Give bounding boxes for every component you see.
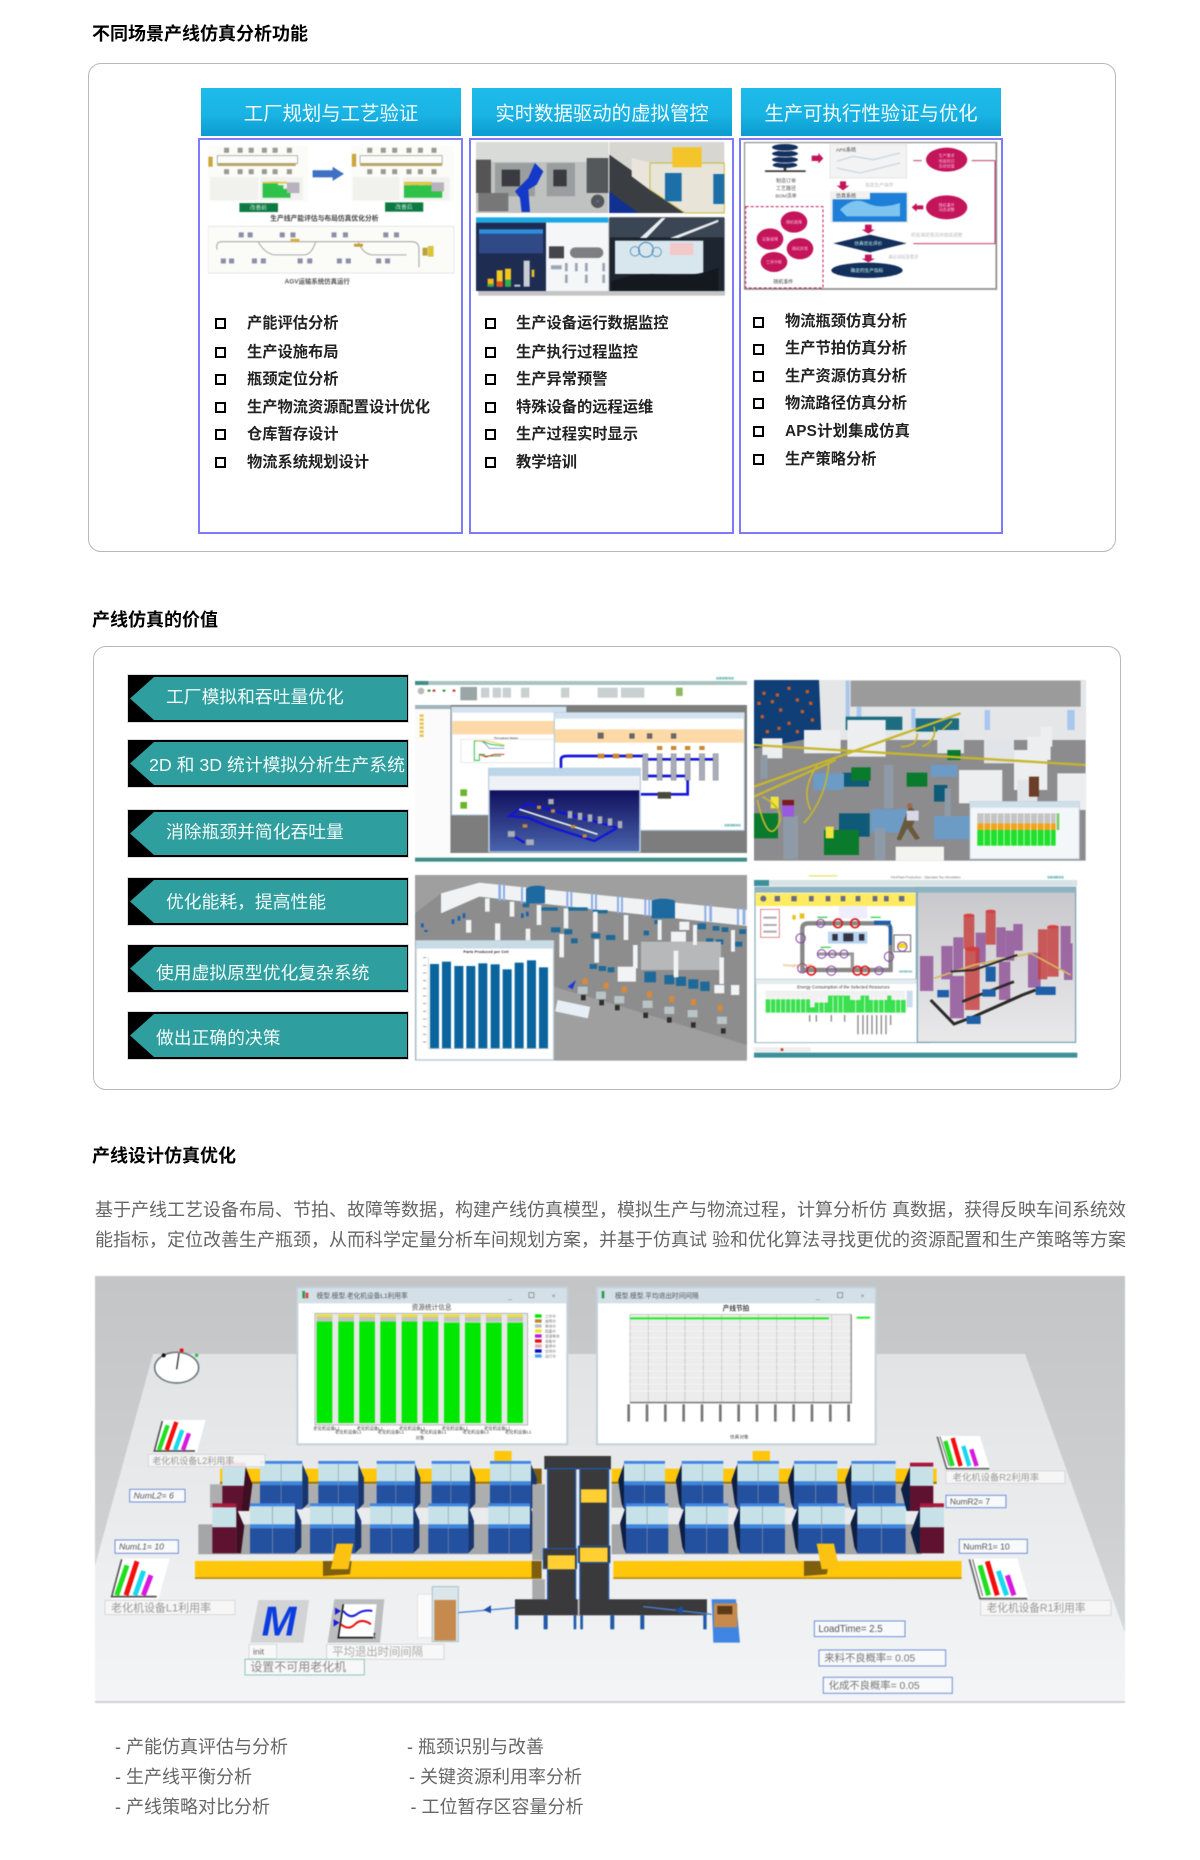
- chart window: utilisation: ×: [552, 1293, 556, 1300]
- chart window: utilisation: 资源等待: [545, 1333, 560, 1338]
- column header: real-time virtual control: [472, 88, 732, 136]
- chart window: utilisation: 老化机设备L1: [420, 1428, 447, 1435]
- flow diagram: APS and simulation loop: APS系统: [836, 146, 856, 153]
- flow diagram: APS and simulation loop: 随机异常: [792, 245, 808, 251]
- parameter labels left: [105, 1454, 444, 1675]
- list item: 生产设施布局: [247, 344, 338, 361]
- panel: value of line simulation: [92, 646, 1121, 1090]
- list item: 生产资源仿真分析: [785, 368, 907, 385]
- column box: executable verification: [739, 138, 1003, 534]
- parameter labels right: NumR1= 10: [963, 1541, 1010, 1551]
- chart window: utilisation: 准备中: [545, 1338, 556, 1343]
- analysis item: - 关键资源利用率分析: [409, 1767, 582, 1787]
- line machines and conveyors: [195, 1451, 542, 1579]
- parameter labels right: 老化机设备R2利用率: [953, 1472, 1039, 1483]
- icon: material station left: [418, 1587, 515, 1642]
- label tag: virtual prototypes: [128, 945, 408, 992]
- list: analysis items right column: [407, 1737, 584, 1817]
- chart window: line takt: 产线节拍: [723, 1303, 750, 1312]
- bullet icon: [753, 454, 764, 465]
- label tag: remove bottlenecks: [128, 810, 408, 857]
- chart window: line takt: [597, 1288, 876, 1444]
- parameter labels right: 来料不良概率= 0.05: [824, 1652, 916, 1665]
- label tag: 2D and 3D statistics: [128, 740, 408, 787]
- chart window: utilisation: 老化机设备L1: [399, 1425, 426, 1432]
- flow diagram: APS and simulation loop: 仿真优化评价: [854, 240, 883, 247]
- column: executable verification: [739, 88, 1003, 534]
- label tag: remove bottlenecks: 消除瓶颈并简化吞吐量: [166, 822, 344, 842]
- bullet icon: [753, 344, 764, 355]
- flow diagram: APS and simulation loop: 制造订单: [776, 178, 796, 185]
- column header: factory planning: [201, 88, 461, 136]
- screenshot: energy analysis with 3D columns: FlexPlant Production - Standard Tec-Simulation: [890, 876, 960, 880]
- flow diagram: APS and simulation loop: 工艺路径: [776, 185, 796, 192]
- column header: real-time virtual control: 实时数据驱动的虚拟管控: [495, 103, 709, 125]
- diagram: layout before and after: 改善后: [395, 203, 413, 211]
- heading: value of line simulation: 产线仿真的价值: [92, 610, 218, 630]
- label tag: factory simulation: [128, 675, 408, 722]
- screenshot: energy analysis with 3D columns: [753, 874, 1078, 1058]
- screenshot: simulation software windows: SIEMENS: [724, 824, 741, 828]
- flow diagram: APS and simulation loop: 确定的生产指标: [851, 267, 884, 274]
- parameter labels left: 老化机设备L2利用率: [152, 1455, 234, 1466]
- list item: 生产物流资源配置设计优化: [247, 399, 430, 416]
- flow diagram: APS and simulation loop: 仿真系统: [836, 193, 856, 200]
- bullet icon: [485, 318, 496, 329]
- bullet icon: [215, 318, 226, 329]
- label tag: factory simulation: 工厂模拟和吞吐量优化: [166, 687, 344, 707]
- screenshot: energy analysis with 3D columns: SIEMENS: [1047, 876, 1064, 880]
- screenshot: simulation software windows: [414, 676, 748, 862]
- flow diagram: APS and simulation loop: 随机事件: [939, 201, 955, 207]
- list item: 生产设备运行数据监控: [516, 315, 668, 332]
- flow diagram: APS and simulation loop: 地面知识: [939, 157, 955, 163]
- description line 2: 能指标，定位改善生产瓶颈，从而科学定量分析车间规划方案，并基于仿真试 验和优化算法寻找更优的资源配置和生产策略等方案: [95, 1230, 1126, 1250]
- analysis item: - 产能仿真评估与分析: [115, 1737, 288, 1757]
- list item: 生产异常预警: [516, 371, 608, 388]
- diagram: layout before and after: 改善前: [250, 204, 267, 212]
- flow diagram: APS and simulation loop: BOM清单: [775, 192, 797, 199]
- bullet icon: [753, 398, 764, 409]
- icon: mini bar chart R2: [937, 1436, 990, 1469]
- bullet icon: [753, 371, 764, 382]
- label tag: 2D and 3D statistics: 2D 和 3D 统计模拟分析生产系统: [149, 755, 405, 775]
- flow diagram: APS and simulation loop: 满足排程及需求: [888, 254, 919, 261]
- chart window: utilisation: _: [507, 1294, 512, 1301]
- label tag: right decisions: [128, 1012, 408, 1059]
- icon: M init block: M: [262, 1597, 298, 1644]
- chart window: utilisation: 故障中: [545, 1318, 556, 1323]
- list item: 物流路径仿真分析: [785, 395, 907, 412]
- flow diagram: APS and simulation loop: 校验满足情况并继续调整: [911, 232, 963, 239]
- icon: graph block: [328, 1599, 384, 1643]
- parameter labels left: NumL1= 10: [119, 1542, 164, 1552]
- parameter labels right: [814, 1471, 1111, 1693]
- chart window: utilisation: 等待中: [545, 1323, 556, 1328]
- diagram: layout before and after: 生产线产能评估与布局仿真优化分析: [270, 214, 379, 223]
- column: real-time virtual control: [469, 88, 734, 534]
- flow diagram: APS and simulation loop: 随机事件: [773, 278, 793, 285]
- parameter labels left: init: [253, 1647, 265, 1657]
- parameter labels left: 老化机设备L1利用率: [111, 1600, 211, 1614]
- background and floor: [95, 1276, 1125, 1703]
- screenshot: factory floor with bar chart: [414, 874, 748, 1062]
- parameter labels left: 设置不可用老化机: [250, 1660, 346, 1674]
- bullet icon: [215, 457, 226, 468]
- analysis item: - 产线策略对比分析: [115, 1797, 270, 1817]
- parameter labels right: 老化机设备R1利用率: [987, 1601, 1086, 1614]
- label tag: right decisions: 做出正确的决策: [156, 1028, 280, 1048]
- analysis item: - 瓶颈识别与改善: [407, 1737, 544, 1757]
- chart window: utilisation: 老化机设备L1: [313, 1425, 340, 1432]
- list item: 产能评估分析: [247, 315, 338, 332]
- icon: mini bar chart R1: [969, 1559, 1029, 1599]
- icon: M init block: [250, 1597, 309, 1644]
- icon: material station right: [643, 1599, 740, 1643]
- diagram: layout before and after: [208, 146, 454, 286]
- column header: executable verification: 生产可执行性验证与优化: [764, 103, 978, 125]
- bullet icon: [215, 347, 226, 358]
- bullet icon: [215, 374, 226, 385]
- screenshot: factory floor with bar chart: Parts Produced per Cell: [463, 949, 508, 954]
- parameter labels right: LoadTime= 2.5: [818, 1624, 883, 1635]
- heading: line design simulation: 产线设计仿真优化: [92, 1146, 236, 1166]
- bullet icon: [215, 429, 226, 440]
- flow diagram: APS and simulation loop: 及经验值: [939, 162, 955, 168]
- chart window: utilisation: 资源统计信息: [412, 1303, 452, 1312]
- icon: mini bar chart L2: [153, 1420, 206, 1453]
- chart window: utilisation: 暂停中: [545, 1343, 556, 1348]
- analysis item: - 工位暂存区容量分析: [410, 1797, 584, 1817]
- flow diagram: APS and simulation loop: 指定生产排序: [865, 181, 894, 188]
- parameter labels right: NumR2= 7: [950, 1497, 990, 1507]
- screenshot: simulation software windows: Throughput Matter: [493, 736, 518, 740]
- chart window: utilisation: 老化机设备L1: [335, 1428, 362, 1435]
- chart window: line takt: _: [815, 1294, 820, 1301]
- chart window: utilisation: [297, 1288, 567, 1444]
- screenshot: energy analysis with 3D columns: Throughput: 4768: [782, 964, 811, 968]
- chart window: utilisation: 老化机设备L1: [442, 1425, 469, 1432]
- chart window: utilisation: 老化机设备L1: [463, 1428, 490, 1435]
- list item: 生产执行过程监控: [516, 344, 638, 361]
- heading: scenario functions: 不同场景产线仿真分析功能: [92, 24, 308, 44]
- parameter labels left: NumL2= 6: [134, 1491, 174, 1501]
- chart window: utilisation: 老化机设备L1: [378, 1428, 405, 1435]
- bullet icon: [485, 402, 496, 413]
- list item: 特殊设备的远程运维: [516, 399, 653, 416]
- flow diagram: APS and simulation loop: 动态调整: [939, 206, 955, 212]
- chart window: line takt: 模型.模型.平均退出时间间隔: [615, 1291, 699, 1300]
- screenshot: energy analysis with 3D columns: SIEMENS: [898, 970, 912, 974]
- description line 1: 基于产线工艺设备布局、节拍、故障等数据，构建产线仿真模型，模拟生产与物流过程，计算分析仿 真数据，获得反映车间系统效: [95, 1200, 1126, 1220]
- diagram: layout before and after: AGV运输系统仿真运行: [285, 276, 350, 285]
- list: analysis items left column: [115, 1737, 288, 1817]
- chart window: utilisation: 老化机设备L1: [357, 1425, 384, 1432]
- list item: 生产策略分析: [785, 451, 876, 468]
- parameter labels right: 化成不良概率= 0.05: [829, 1679, 920, 1692]
- bullet icon: [485, 347, 496, 358]
- column box: factory planning: [198, 138, 463, 534]
- chart window: line takt: ×: [861, 1293, 865, 1300]
- list item: 生产节拍仿真分析: [785, 340, 907, 357]
- label tag: optimise energy: [128, 878, 408, 925]
- flow diagram: APS and simulation loop: 生产需求: [939, 152, 955, 158]
- list item: 瓶颈定位分析: [247, 371, 338, 388]
- column box: real-time virtual control: [469, 138, 734, 534]
- icon: graph block: t: [373, 1631, 376, 1641]
- chart window: utilisation: 老化机设备L1: [505, 1428, 532, 1435]
- list item: 物流瓶颈仿真分析: [785, 313, 907, 330]
- icon: stopwatch: [155, 1348, 199, 1383]
- bullet icon: [753, 426, 764, 437]
- screenshot: energy analysis with 3D columns: Energy Consumption of the Selected Resources: [797, 985, 889, 990]
- central dark conveyor: [515, 1456, 707, 1629]
- text block: description: [95, 1200, 1126, 1250]
- bullet icon: [753, 317, 764, 328]
- bullet icon: [485, 457, 496, 468]
- list item: 物流系统规划设计: [247, 454, 369, 471]
- chart window: utilisation: 工作中: [545, 1313, 556, 1318]
- list item: 仓库暂存设计: [247, 426, 338, 443]
- chart window: utilisation: 运行中: [545, 1353, 556, 1358]
- icon: mini bar chart L1: [111, 1559, 170, 1599]
- bullet icon: [485, 374, 496, 385]
- list item: APS计划集成仿真: [785, 423, 910, 440]
- photo grid: workshop and dashboards: [475, 142, 726, 296]
- list item: 生产过程实时显示: [516, 426, 638, 443]
- column header: executable verification: [741, 88, 1001, 136]
- chart window: line takt: 仿真对象: [730, 1434, 749, 1441]
- column header: factory planning: 工厂规划与工艺验证: [244, 103, 418, 125]
- right side machines and conveyors: [612, 1451, 962, 1579]
- bullet icon: [485, 429, 496, 440]
- panel: scenario functions: [88, 63, 1116, 552]
- bullet icon: [215, 402, 226, 413]
- chart window: utilisation: 模型.模型.老化机设备L1利用率: [317, 1291, 408, 1300]
- label tag: optimise energy: 优化能耗，提高性能: [166, 892, 326, 912]
- column: factory planning: [198, 88, 463, 534]
- flow diagram: APS and simulation loop: 工序中断: [766, 258, 782, 264]
- chart window: utilisation: 阻塞中: [545, 1328, 556, 1333]
- screenshot: 3D factory with overhead conveyor: [753, 679, 1086, 862]
- illustration: 3D production line simulation: [94, 1276, 1126, 1704]
- parameter labels left: 平均退出时间间隔: [332, 1644, 423, 1658]
- chart window: utilisation: 老化机设备L1: [484, 1425, 511, 1432]
- flow diagram: APS and simulation loop: [743, 141, 998, 290]
- chart window: utilisation: 对象: [416, 1434, 425, 1440]
- flow diagram: APS and simulation loop: 随机故障: [786, 218, 802, 224]
- analysis item: - 生产线平衡分析: [115, 1767, 252, 1787]
- flow diagram: APS and simulation loop: 设备故障: [762, 235, 778, 241]
- label tag: virtual prototypes: 使用虚拟原型优化复杂系统: [156, 963, 369, 983]
- chart window: utilisation: 空闲中: [545, 1348, 556, 1353]
- list item: 教学培训: [516, 454, 577, 471]
